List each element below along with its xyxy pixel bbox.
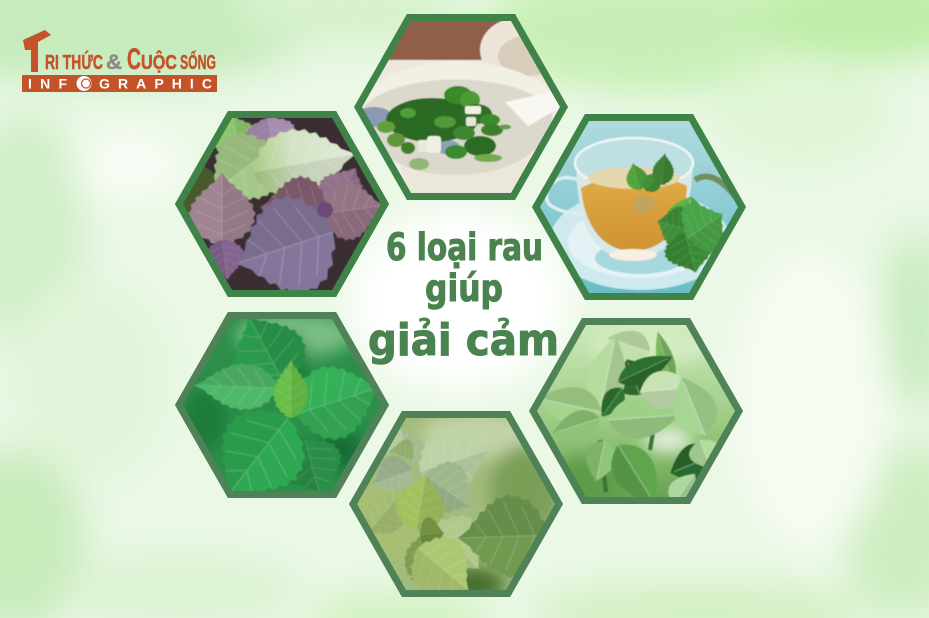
logo wordmark: RI THỨC: [45, 50, 103, 74]
logo banner: INF: [28, 76, 67, 92]
logo: Tri Thức & Cuộc Sống Infographic: [22, 30, 217, 92]
logo banner: [22, 75, 217, 92]
logo wordmark: UỘC: [141, 50, 177, 74]
hexagon frame: [353, 414, 559, 594]
hexagon: purple perilla leaves: [175, 111, 389, 297]
basil photo: [529, 319, 743, 504]
logo wordmark: [45, 43, 216, 76]
hexagon frame: [536, 118, 742, 296]
title: 6 loại rau giúp giải cảm: giải cảm: [368, 315, 559, 366]
hexagon frame: [179, 316, 385, 494]
logo icon: large letter T: [23, 30, 51, 72]
logo banner: GRAPHIC: [99, 76, 212, 92]
logo wordmark: SỐNG: [180, 50, 216, 74]
hexagon: Indian borage leaves: [349, 411, 563, 597]
green perilla photo: [175, 312, 389, 498]
herb garnish: [377, 86, 511, 170]
title: 6 loại rau giúp giải cảm: giúp: [425, 267, 503, 310]
hexagon frame: [533, 322, 739, 500]
hexagon frame: [179, 114, 385, 294]
logo wordmark: C: [127, 43, 141, 76]
title: 6 loại rau giúp giải cảm: [368, 226, 559, 366]
perilla photo: [175, 111, 389, 297]
borage photo: [349, 411, 563, 597]
hexagon: green perilla leaves: [175, 312, 389, 498]
hexagon frame: [358, 18, 564, 196]
title: 6 loại rau giúp giải cảm: 6 loại rau: [386, 226, 543, 269]
porridge photo: [358, 14, 560, 193]
tea photo: [530, 110, 750, 305]
hexagon: rice porridge with herbs: [350, 10, 570, 210]
hexagon: mint tea: [530, 110, 750, 305]
hexagon: basil plants: [529, 318, 743, 504]
logo wordmark: &: [106, 51, 122, 74]
